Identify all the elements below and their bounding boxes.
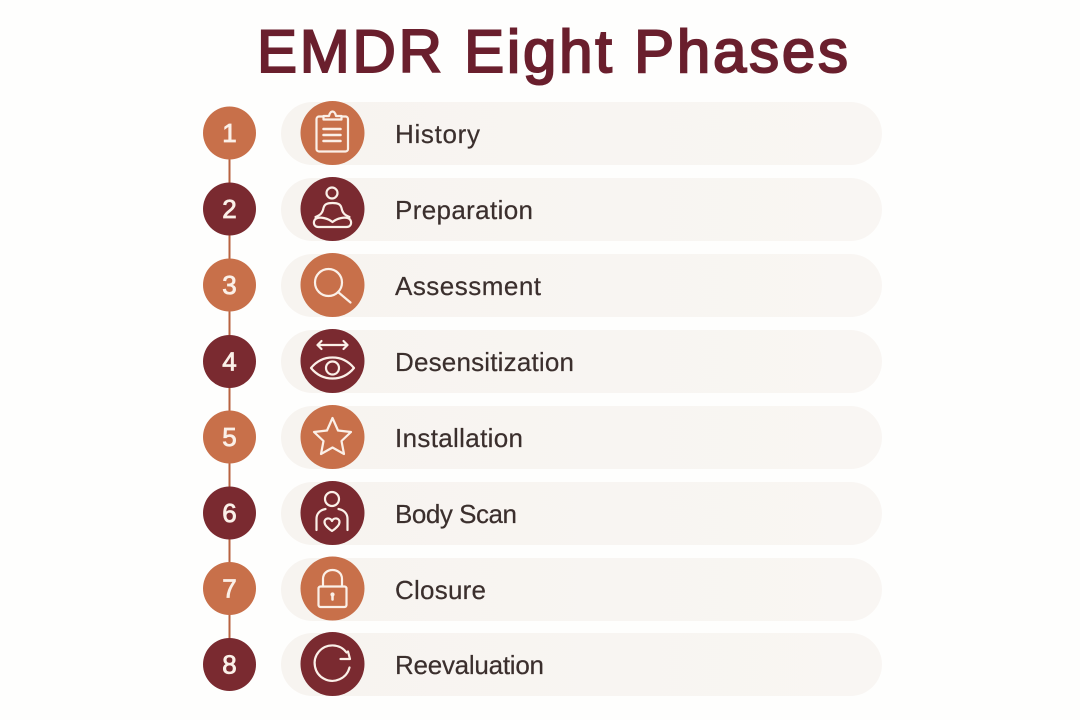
icon: refresh arrow	[315, 645, 350, 681]
row 2: Preparation: Preparation	[395, 195, 533, 225]
row 2: Preparation	[203, 177, 882, 241]
row 6: Body Scan: 6	[222, 498, 237, 528]
row 6: Body Scan: Body Scan	[395, 499, 517, 529]
row 4: Desensitization: 4	[222, 346, 237, 376]
row 7: Closure: Closure	[395, 575, 486, 605]
row 7: Closure	[203, 556, 882, 621]
row 1: History: History	[395, 119, 480, 149]
row 5: Installation: 5	[222, 422, 237, 452]
row 3: Assessment	[203, 253, 882, 317]
timeline connector	[228, 133, 230, 665]
icon: eye with arrow	[311, 341, 354, 378]
icon: padlock	[318, 570, 346, 607]
icon: body with heart	[316, 492, 348, 531]
title: EMDR Eight Phases	[257, 18, 848, 85]
row 1: History	[203, 101, 882, 165]
row 1: History: 1	[222, 118, 237, 148]
icon: magnifier	[315, 269, 350, 302]
row 8: Reevaluation: Reevaluation	[395, 650, 544, 680]
row 4: Desensitization: Desensitization	[395, 347, 574, 377]
row 2: Preparation: 2	[222, 194, 237, 224]
row 7: Closure: 7	[222, 574, 237, 604]
icon: meditation	[314, 188, 351, 227]
row 8: Reevaluation: 8	[222, 650, 237, 680]
row 5: Installation: Installation	[395, 423, 523, 453]
row 8: Reevaluation	[203, 632, 882, 696]
row 4: Desensitization	[203, 329, 882, 393]
row 3: Assessment: Assessment	[395, 271, 542, 301]
row 5: Installation	[203, 405, 882, 469]
row 3: Assessment: 3	[222, 270, 237, 300]
icon: clipboard	[316, 112, 348, 152]
icon: star	[314, 418, 351, 454]
row 6: Body Scan	[203, 481, 882, 545]
